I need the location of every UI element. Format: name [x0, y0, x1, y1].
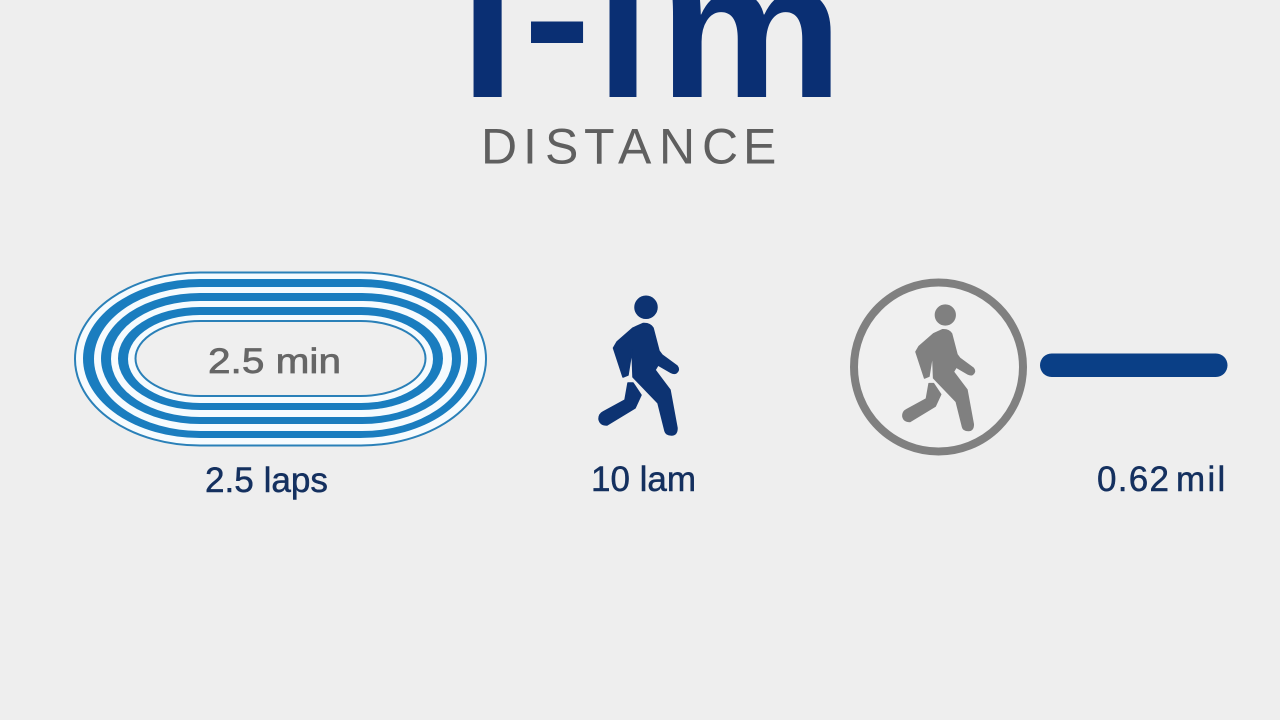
track label: 2.5 min: 2.5 min	[208, 342, 341, 381]
distance bar	[1040, 354, 1228, 377]
label: 0.62 mil: 0.62	[1097, 460, 1170, 499]
label: 10 lam: 10 lam	[591, 460, 696, 499]
icon: grey walking figure in a circle	[854, 282, 1023, 452]
label: 0.62 mil: mil	[1176, 460, 1228, 499]
icon: running track with lap time	[75, 272, 486, 446]
subtitle: DISTANCE: DISTANCE	[481, 118, 776, 174]
label: 2.5 laps: 2.5 laps	[205, 461, 328, 500]
icon: walking figure, navy	[599, 296, 678, 435]
title: large distance value, cropped at the top edge	[460, 0, 844, 139]
